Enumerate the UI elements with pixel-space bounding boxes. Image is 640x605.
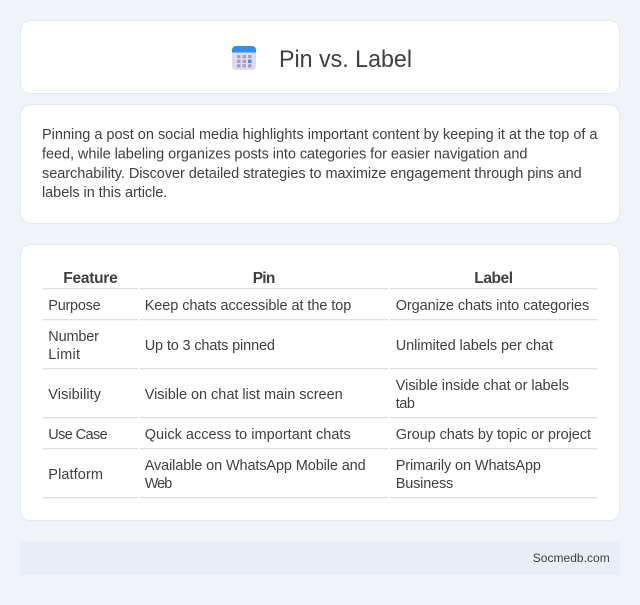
row: use case: Group chats by topic or project	[396, 427, 591, 443]
description text: feed, while labeling organizes posts into categories for easier navigation and	[42, 146, 528, 162]
table rules	[43, 288, 597, 498]
footer credit: Socmedb.com	[533, 551, 610, 565]
icon: calendar	[232, 46, 256, 70]
row: number limit: Unlimited labels per chat	[396, 338, 553, 354]
panel: comparison table	[20, 244, 620, 520]
row: visibility: Visibility	[48, 387, 102, 403]
row: purpose	[48, 298, 589, 314]
description text: labels in this article.	[42, 185, 167, 201]
row: use case: Use Case	[48, 427, 108, 443]
table header row: Feature	[63, 270, 118, 287]
row: number limit: Limit	[48, 347, 80, 363]
row: number limit: Up to 3 chats pinned	[145, 338, 275, 354]
row: platform: Business	[396, 476, 453, 492]
panel: description	[20, 104, 620, 224]
row: platform: Primarily on WhatsApp	[396, 458, 541, 474]
description text: Pinning a post on social media highlights important content by keeping it at the top of a	[42, 127, 598, 143]
row: purpose: Organize chats into categories	[396, 298, 589, 314]
row: platform: Platform	[48, 467, 103, 483]
panel: header	[20, 20, 620, 94]
description text	[42, 127, 598, 201]
footer	[20, 541, 620, 575]
row: platform: Available on WhatsApp Mobile and	[145, 458, 366, 474]
row: visibility: Visible inside chat or labels	[396, 378, 569, 394]
table header row: Label	[474, 270, 513, 287]
row: platform: Web	[145, 476, 172, 492]
row: purpose: Purpose	[48, 298, 101, 314]
row: use case: Quick access to important chats	[145, 427, 351, 443]
row: number limit	[48, 329, 553, 363]
row: use case	[48, 427, 591, 443]
row: visibility	[48, 378, 569, 412]
row: number limit: Number	[48, 329, 99, 345]
row: visibility: Visible on chat list main screen	[145, 387, 343, 403]
title: Pin vs. Label	[279, 46, 412, 73]
row: purpose: Keep chats accessible at the top	[145, 298, 351, 314]
table header row	[63, 270, 513, 287]
description text: searchability. Discover detailed strategies to maximize engagement through pins and	[42, 166, 582, 182]
table header row: Pin	[253, 270, 275, 287]
row: platform	[48, 458, 541, 492]
row: visibility: tab	[396, 396, 415, 412]
